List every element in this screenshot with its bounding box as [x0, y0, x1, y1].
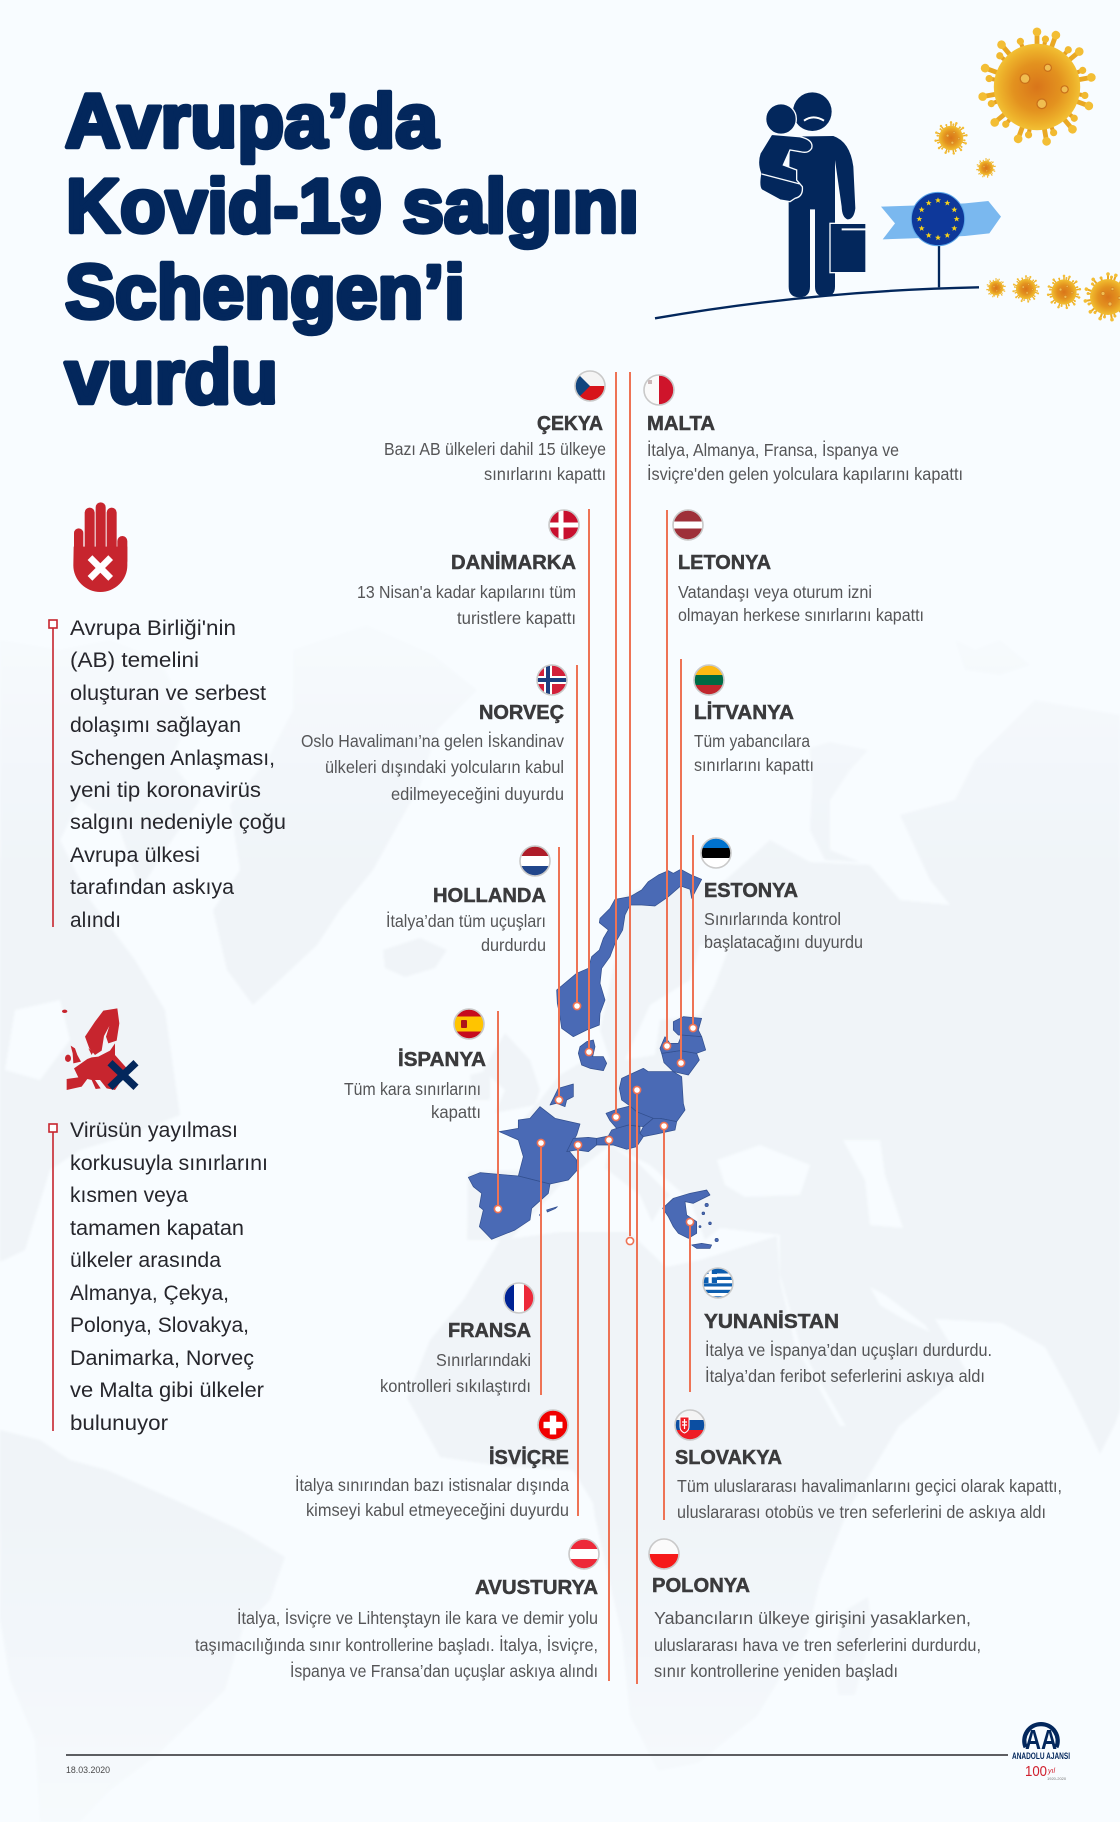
EU flag circle — [911, 192, 965, 246]
flag — [504, 1283, 534, 1313]
flag — [537, 665, 567, 695]
name: FRANSA — [448, 1319, 531, 1342]
description — [677, 1476, 1062, 1522]
flag — [644, 375, 674, 405]
paragraph: Polonya, Slovakya, — [70, 1314, 249, 1337]
description: sınırlarını kapattı — [484, 464, 606, 484]
icon: red Europe with navy X — [62, 1008, 136, 1090]
paragraph: korkusuyla sınırlarını — [70, 1152, 268, 1175]
panel: İsviçre — [295, 1410, 569, 1520]
child — [758, 104, 812, 202]
flag — [520, 846, 550, 876]
description: İspanya ve Fransa’dan uçuşlar askıya alındı — [290, 1661, 598, 1681]
description: 13 Nisan'a kadar kapılarını tüm — [357, 582, 576, 602]
logo: Anadolu Ajansı: 1920-2020 — [1047, 1776, 1067, 1781]
logo: Anadolu Ajansı: ANADOLU AJANSI — [1012, 1751, 1070, 1761]
paragraph: oluşturan ve serbest — [70, 682, 266, 705]
description — [384, 439, 606, 484]
name: İSVİÇRE — [489, 1446, 569, 1469]
panel: Fransa — [380, 1283, 534, 1396]
icon: large virus — [978, 27, 1096, 146]
description — [654, 1608, 981, 1681]
icon: small virus 2 — [976, 158, 996, 178]
flag — [673, 510, 703, 540]
description: İtalya ve İspanya’dan uçuşları durdurdu. — [705, 1340, 992, 1360]
leader: Estonya — [689, 835, 697, 1032]
name: HOLLANDA — [433, 884, 546, 907]
title: vurdu — [65, 335, 278, 420]
description: İtalya, Almanya, Fransa, İspanya ve — [647, 440, 899, 460]
ground line — [655, 287, 979, 318]
logo: Anadolu Ajansı: yıl — [1047, 1768, 1055, 1775]
panel: İspanya — [344, 1009, 486, 1122]
title: Avrupa’da — [65, 79, 439, 164]
icon: small virus 6 — [1083, 272, 1120, 322]
title — [65, 79, 639, 420]
description — [195, 1608, 598, 1681]
leader lines with points — [494, 372, 697, 1684]
icon: small virus 1 — [934, 121, 968, 155]
description: kimseyi kabul etmeyeceğini duyurdu — [306, 1500, 569, 1520]
paragraph: salgını nedeniyle çoğu — [70, 811, 286, 834]
description: Vatandaşı veya oturum izni — [678, 582, 872, 602]
name: AVUSTURYA — [475, 1576, 598, 1599]
footer rule — [66, 1754, 1008, 1756]
bullet line — [49, 1124, 57, 1431]
description: taşımacılığında sınır kontrollerine başladı. İtalya, İsviçre, — [195, 1635, 598, 1655]
name: SLOVAKYA — [675, 1446, 782, 1469]
flag — [538, 1410, 568, 1440]
paragraph: ve Malta gibi ülkeler — [70, 1379, 264, 1402]
world map background — [0, 625, 1120, 1822]
description — [380, 1350, 531, 1396]
paragraph: dolaşımı sağlayan — [70, 714, 241, 737]
description: uluslararası otobüs ve tren seferlerini de askıya aldı — [677, 1502, 1046, 1522]
title: Schengen’i — [65, 250, 465, 335]
description: İsviçre'den gelen yolculara kapılarını kapattı — [647, 464, 963, 484]
logo: Anadolu Ajansı: AA — [1025, 1724, 1057, 1755]
panel: Norveç — [301, 665, 567, 804]
panel: Avusturya — [195, 1539, 599, 1681]
description: Oslo Havalimanı’na gelen İskandinav — [301, 731, 564, 751]
leader: Polonya — [633, 1086, 641, 1684]
leader: Slovakya — [660, 1122, 668, 1520]
leader: Danimarka — [585, 509, 593, 1056]
description — [704, 909, 863, 952]
leader: Hollanda — [555, 847, 563, 1104]
leader: Avusturya — [605, 1136, 613, 1681]
paragraph — [70, 1119, 268, 1435]
leader: İspanya — [494, 1011, 502, 1213]
description: sınırlarını kapattı — [694, 755, 814, 775]
paragraph: bulunuyor — [70, 1412, 168, 1435]
name: İSPANYA — [398, 1048, 486, 1071]
description — [357, 582, 576, 628]
icon: red stop hand — [73, 502, 127, 592]
paragraph: kısmen veya — [70, 1184, 188, 1207]
name: YUNANİSTAN — [704, 1310, 839, 1333]
paragraph: yeni tip koronavirüs — [70, 779, 261, 802]
panel: Litvanya — [694, 665, 814, 775]
icon: small virus 4 — [1012, 275, 1040, 303]
icon: small virus 3 — [986, 278, 1006, 298]
leader: Fransa — [537, 1139, 545, 1395]
description — [295, 1475, 569, 1520]
description — [301, 731, 564, 804]
leader: Yunanistan — [686, 1218, 694, 1392]
flag — [549, 510, 579, 540]
panel: Estonya — [701, 838, 863, 952]
panel: Hollanda — [386, 846, 550, 955]
description — [694, 731, 814, 775]
description: Sınırlarındaki — [436, 1350, 531, 1370]
paragraph: Danimarka, Norveç — [70, 1347, 254, 1370]
description: Tüm yabancılara — [694, 731, 810, 751]
paragraph: ülkeler arasında — [70, 1249, 221, 1272]
leader: Letonya — [663, 510, 671, 1050]
flag — [569, 1539, 599, 1569]
leader: İsviçre — [574, 1141, 582, 1516]
flag — [694, 665, 724, 695]
name: NORVEÇ — [479, 701, 564, 724]
description: kapattı — [431, 1102, 481, 1122]
name: LETONYA — [678, 551, 771, 574]
panel: Slovakya — [675, 1410, 1062, 1522]
flag — [703, 1268, 733, 1298]
panel: Polonya — [649, 1539, 981, 1681]
description — [705, 1340, 992, 1386]
paragraph: tarafından askıya — [70, 876, 234, 899]
name: ESTONYA — [704, 879, 798, 902]
logo: Anadolu Ajansı: 100 — [1025, 1763, 1047, 1780]
flag — [575, 371, 605, 401]
description: başlatacağını duyurdu — [704, 932, 863, 952]
date: 18.03.2020 — [66, 1765, 110, 1775]
description — [678, 582, 924, 625]
panel: Letonya — [673, 510, 924, 625]
description: olmayan herkese sınırlarını kapattı — [678, 605, 924, 625]
paragraph: (AB) temelini — [70, 649, 199, 672]
leader: Çekya — [612, 372, 620, 1121]
signpost ribbon — [881, 201, 1001, 239]
description: durdurdu — [481, 935, 546, 955]
description: sınır kontrollerine yeniden başladı — [654, 1661, 898, 1681]
description: edilmeyeceğini duyurdu — [391, 784, 564, 804]
flag — [701, 838, 731, 868]
description: Bazı AB ülkeleri dahil 15 ülkeye — [384, 439, 606, 459]
text block: countries closing borders — [49, 1119, 268, 1435]
bullet line — [49, 620, 57, 927]
name: DANİMARKA — [451, 551, 576, 574]
signpost pole — [935, 245, 942, 287]
icon: small virus 5 — [1047, 275, 1081, 309]
description: turistlere kapattı — [457, 608, 576, 628]
paragraph: alındı — [70, 909, 121, 932]
panel: Çekya — [384, 371, 606, 484]
description — [386, 911, 546, 955]
paragraph: Almanya, Çekya, — [70, 1282, 229, 1305]
description: uluslararası hava ve tren seferlerini durdurdu, — [654, 1635, 981, 1655]
paragraph: Schengen Anlaşması, — [70, 747, 275, 770]
description: ülkeleri dışındaki yolcuların kabul — [325, 757, 564, 777]
description: Sınırlarında kontrol — [704, 909, 841, 929]
name: ÇEKYA — [537, 412, 603, 435]
leader: Norveç — [573, 665, 581, 1010]
name: LİTVANYA — [694, 701, 794, 724]
briefcase — [830, 223, 866, 273]
paragraph: Avrupa ülkesi — [70, 844, 200, 867]
description: İtalya’dan feribot seferlerini askıya aldı — [705, 1366, 985, 1386]
panel: Danimarka — [357, 510, 579, 628]
logo: Anadolu Ajansı — [1012, 1724, 1070, 1781]
description: İtalya, İsviçre ve Lihtenştayn ile kara ve demir yolu — [237, 1608, 598, 1628]
leader: Malta — [626, 372, 634, 1245]
man — [789, 92, 855, 297]
Europe map: highlighted countries — [468, 869, 718, 1248]
paragraph: tamamen kapatan — [70, 1217, 244, 1240]
flag — [454, 1009, 484, 1039]
description: kontrolleri sıkılaştırdı — [380, 1376, 531, 1396]
title: Kovid-19 salgını — [66, 164, 639, 249]
leader: Litvanya — [677, 659, 685, 1067]
paragraph: Avrupa Birliği'nin — [70, 617, 236, 640]
text block: Schengen — [49, 617, 286, 932]
paragraph: Virüsün yayılması — [70, 1119, 238, 1142]
paragraph — [70, 617, 286, 932]
description: Tüm kara sınırlarını — [344, 1079, 481, 1099]
description: İtalya sınırından bazı istisnalar dışında — [295, 1475, 569, 1495]
panel: Yunanistan — [703, 1268, 992, 1386]
illustration: person carrying child beside EU sign — [655, 92, 1001, 318]
flag — [675, 1410, 705, 1440]
description — [344, 1079, 481, 1122]
flag — [649, 1539, 679, 1569]
description: İtalya’dan tüm uçuşları — [386, 911, 546, 931]
description: Yabancıların ülkeye girişini yasaklarken, — [654, 1608, 971, 1628]
description: Tüm uluslararası havalimanlarını geçici olarak kapattı, — [677, 1476, 1062, 1496]
description — [647, 440, 963, 484]
panel: Malta — [644, 375, 963, 484]
name: POLONYA — [652, 1574, 750, 1597]
name: MALTA — [647, 412, 715, 435]
